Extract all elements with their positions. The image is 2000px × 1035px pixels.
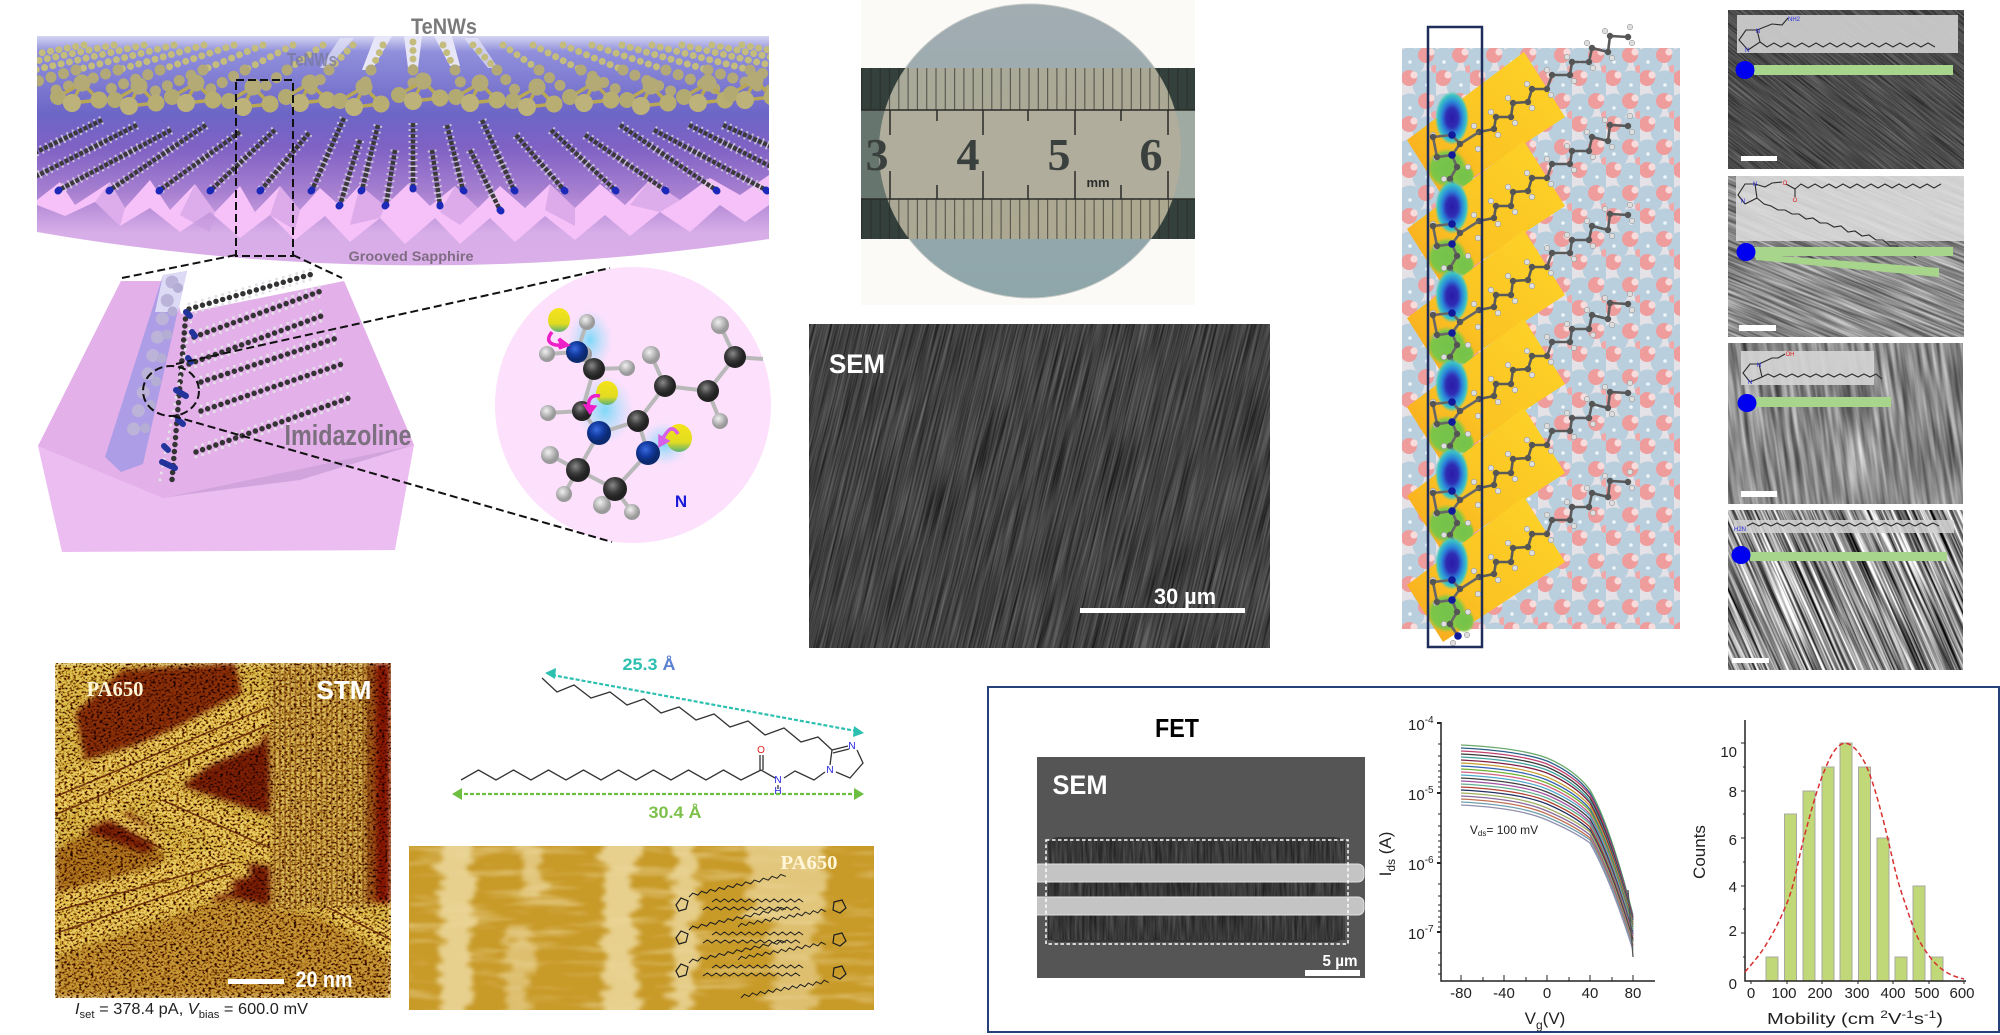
panel: high-resolution STM with molecule overlay (409, 846, 874, 1010)
icon: tellurium nanowire atoms (37, 38, 769, 116)
panel: STM image (45, 663, 395, 1021)
text: ruler digits: 5 (1048, 129, 1070, 180)
heading: FET: FET (1155, 713, 1199, 743)
caption: tunnelling parameters: = 378.4 pA, (95, 1001, 188, 1018)
icon: hydrogen atoms (539, 314, 729, 520)
text: x tick labels: -40 (1493, 985, 1515, 1002)
chart: transfer curves (1376, 715, 1655, 1032)
text: y tick labels: -5 (1425, 785, 1434, 796)
label: Vds annotation: V (1470, 823, 1478, 837)
panel: atom close-up circle (495, 267, 771, 543)
text: ruler digits (866, 129, 1162, 180)
icon: lattice rows on right band (270, 663, 370, 908)
panel: SEM with ester surfactant (1728, 176, 1964, 337)
panel: large SEM image (809, 324, 1270, 648)
icon: repeated molecule units (1407, 24, 1635, 646)
label: x axis: (V) (1543, 1009, 1565, 1028)
text: molecule atoms: N (826, 765, 834, 776)
text: y tick labels: 10 (1408, 787, 1425, 804)
caption: tunnelling parameters: set (80, 1009, 95, 1021)
label: x axis: V (1525, 1009, 1536, 1028)
label: 20 nm: 20 nm (296, 967, 352, 992)
panel: zoomed groove with imidazoline molecules (38, 268, 414, 552)
label: Grooved Sapphire: Grooved Sapphire (348, 248, 474, 264)
label: Imidazoline: Imidazoline (284, 420, 412, 452)
icon: pink sapphire groove facets (37, 175, 769, 244)
scale bar (1739, 325, 1776, 331)
data: gaussian fit (1745, 743, 1964, 979)
data: curves (1461, 745, 1633, 957)
inset: molecule: NH2 (1788, 17, 1801, 23)
label: SEM: SEM (829, 349, 885, 379)
bar: two chain lengths (1754, 247, 1953, 277)
text: ruler digits: 4 (956, 129, 980, 180)
text: y tick labels: 8 (1729, 784, 1737, 801)
text: ruler digits: 3 (866, 129, 888, 180)
icon: ruler ticks (861, 89, 1195, 219)
text: molecule atoms: N (774, 775, 782, 786)
text: x tick labels (1450, 985, 1641, 1002)
inset: molecule: N (1741, 199, 1745, 205)
bar: molecule length (1754, 65, 1953, 75)
inset: molecule: N (1756, 29, 1760, 35)
inset: molecule (1741, 351, 1882, 386)
icon: nanowire channel (1048, 837, 1345, 942)
text: y tick labels: 4 (1729, 879, 1737, 896)
axes (1437, 722, 1655, 981)
arrow: 25.3 Å span (545, 668, 864, 737)
scale bar (1741, 156, 1777, 161)
text: y tick labels: 10 (1408, 717, 1425, 734)
arrow: pink charge transfer arrows (549, 332, 678, 445)
chart: fanned imidazoline molecule rows (37, 116, 769, 214)
text: y tick labels: 0 (1729, 976, 1737, 993)
text: molecule atoms: H (774, 786, 782, 797)
text: x tick labels: 40 (1582, 985, 1598, 1002)
panel: PA650 molecular structure (452, 655, 864, 822)
panel: SEM with hydroxy surfactant (1728, 343, 1963, 504)
icon: charge-transfer glows (568, 310, 688, 466)
label: mm: mm (1086, 175, 1110, 190)
text: x tick labels: 400 (1880, 985, 1906, 1002)
icon: molecule bonds (547, 322, 763, 512)
bar: molecule length (1756, 397, 1891, 407)
label: y axis: I (1376, 872, 1395, 876)
inset: molecule: N (1753, 182, 1757, 188)
inset: molecule: O (1783, 181, 1788, 187)
inset: molecule: N (1748, 380, 1752, 386)
text: y tick labels: 6 (1729, 832, 1737, 849)
chart: mobility histogram (1690, 720, 1975, 1028)
text: molecule atoms: O (757, 745, 765, 756)
label: PA650: PA650 (780, 852, 838, 874)
inset: molecule (1737, 15, 1958, 54)
inset: molecule: O (1793, 198, 1798, 204)
label: y axis: (A) (1376, 832, 1395, 859)
inset: molecule: N (1745, 48, 1749, 54)
label: Mobility: -1 (1901, 1009, 1914, 1021)
text: molecule atoms (757, 741, 856, 797)
scale bar (1080, 608, 1245, 613)
icon: tellurium wire strip (105, 271, 187, 472)
icon: nitrogen atoms (566, 341, 660, 465)
icon: head group dot (1736, 243, 1756, 261)
label: PA650: PA650 (86, 677, 144, 701)
text: y tick labels: 2 (1729, 923, 1737, 940)
text: x tick labels: 600 (1949, 985, 1975, 1002)
text: y tick labels: 10 (1408, 857, 1425, 874)
icon: head group dot (1738, 394, 1756, 412)
inset: molecule: N (1757, 363, 1761, 369)
bar: molecule length (1750, 552, 1947, 561)
callout: navy selection box (1428, 27, 1482, 647)
callout: dashed channel box (1046, 840, 1348, 944)
label: N: N (675, 492, 687, 511)
panel: SEM with imidazoline-amine surfactant (1728, 10, 1964, 169)
text: x tick labels: 500 (1914, 985, 1940, 1002)
scale bar (1732, 658, 1769, 663)
icon: molecule overlay (676, 873, 846, 998)
panel: FET SEM image (1030, 757, 1365, 978)
scale bar (228, 979, 284, 984)
text: ruler digits: 6 (1140, 129, 1162, 180)
label: Mobility: s (1914, 1011, 1924, 1028)
inset: molecule (1734, 520, 1954, 533)
icon: tellurium yellow atoms (548, 308, 692, 452)
label: y axis: ds (1384, 859, 1398, 872)
icon: horizontal scan blotches (409, 846, 874, 1010)
text: y tick labels (1408, 715, 1434, 943)
scale bar (1741, 491, 1777, 497)
text: x tick labels: 80 (1625, 985, 1641, 1002)
text: y tick labels: 10 (1408, 926, 1425, 943)
label: Vds annotation: ds (1478, 829, 1486, 838)
text: y tick labels: 10 (1720, 744, 1737, 761)
panel: SEM with oleylamine (1728, 510, 1963, 670)
heading: TeNWs: TeNWs (411, 14, 477, 39)
text: y tick labels: -4 (1425, 715, 1434, 726)
label: Mobility: V (1888, 1011, 1902, 1028)
text: y tick labels: -7 (1425, 924, 1434, 935)
inset: molecule: OH (1786, 352, 1794, 358)
label: Vds annotation: = 100 mV (1486, 823, 1538, 837)
label: Counts: Counts (1690, 825, 1709, 879)
icon: molecule skeleton (461, 678, 863, 789)
text: x tick labels: 300 (1844, 985, 1870, 1002)
arrow: 30.4 Å span (452, 788, 864, 800)
caption: tunnelling parameters: I (75, 1001, 80, 1018)
label: 5 µm: 5 µm (1322, 953, 1358, 970)
label: 30 µm: 30 µm (1154, 584, 1216, 609)
text: x tick labels (1747, 985, 1975, 1002)
text: x tick labels: 0 (1543, 985, 1551, 1002)
text: x tick labels: 200 (1807, 985, 1833, 1002)
caption: tunnelling parameters: = 600.0 mV (219, 1001, 308, 1018)
label: ghost TeNWs: TeNWs (287, 50, 337, 70)
icon: ruler through wafer (861, 68, 1195, 239)
icon: carbon atoms (566, 346, 746, 501)
label: Mobility: 2 (1880, 1009, 1888, 1021)
panel: FET frame (988, 687, 1999, 1032)
panel: wafer photo on ruler (861, 0, 1195, 305)
text: molecule atoms: N (848, 741, 856, 752)
icon: electrodes (1030, 864, 1364, 915)
caption: tunnelling parameters: V (188, 1001, 200, 1018)
inset: molecule: H2N (1734, 527, 1746, 533)
bars (1766, 743, 1943, 981)
label: 25.3 Å: 25.3 Å (622, 655, 676, 674)
text: x tick labels: 100 (1771, 985, 1797, 1002)
icon: head group dot (1736, 61, 1754, 79)
label: Mobility: -1 (1924, 1009, 1936, 1021)
text: y tick labels: -6 (1425, 855, 1434, 866)
panel: molecular model on sapphire with charge maps (1402, 24, 1680, 647)
caption: tunnelling parameters: bias (199, 1009, 220, 1021)
chart: imidazoline chains (160, 268, 349, 480)
text: y tick labels (1720, 744, 1737, 993)
axes (1741, 720, 1966, 984)
label: 30.4 Å: 30.4 Å (648, 803, 702, 822)
label: Mobility: ) (1936, 1011, 1943, 1028)
scale bar (1305, 970, 1360, 976)
label: x axis: g (1536, 1018, 1543, 1032)
inset: molecule (1736, 176, 1964, 258)
panel: TeNWs on grooved sapphire (37, 18, 769, 266)
callout: dashed zoom box and guides (122, 80, 612, 542)
icon: head group dot (1732, 546, 1750, 564)
label: SEM: SEM (1052, 770, 1108, 800)
icon: ruler outside wafer (861, 68, 1195, 239)
label: STM: STM (316, 675, 372, 705)
text: x tick labels: -80 (1450, 985, 1472, 1002)
text: x tick labels: 0 (1747, 985, 1755, 1002)
label: Mobility: Mobility (cm (1767, 1011, 1852, 1028)
